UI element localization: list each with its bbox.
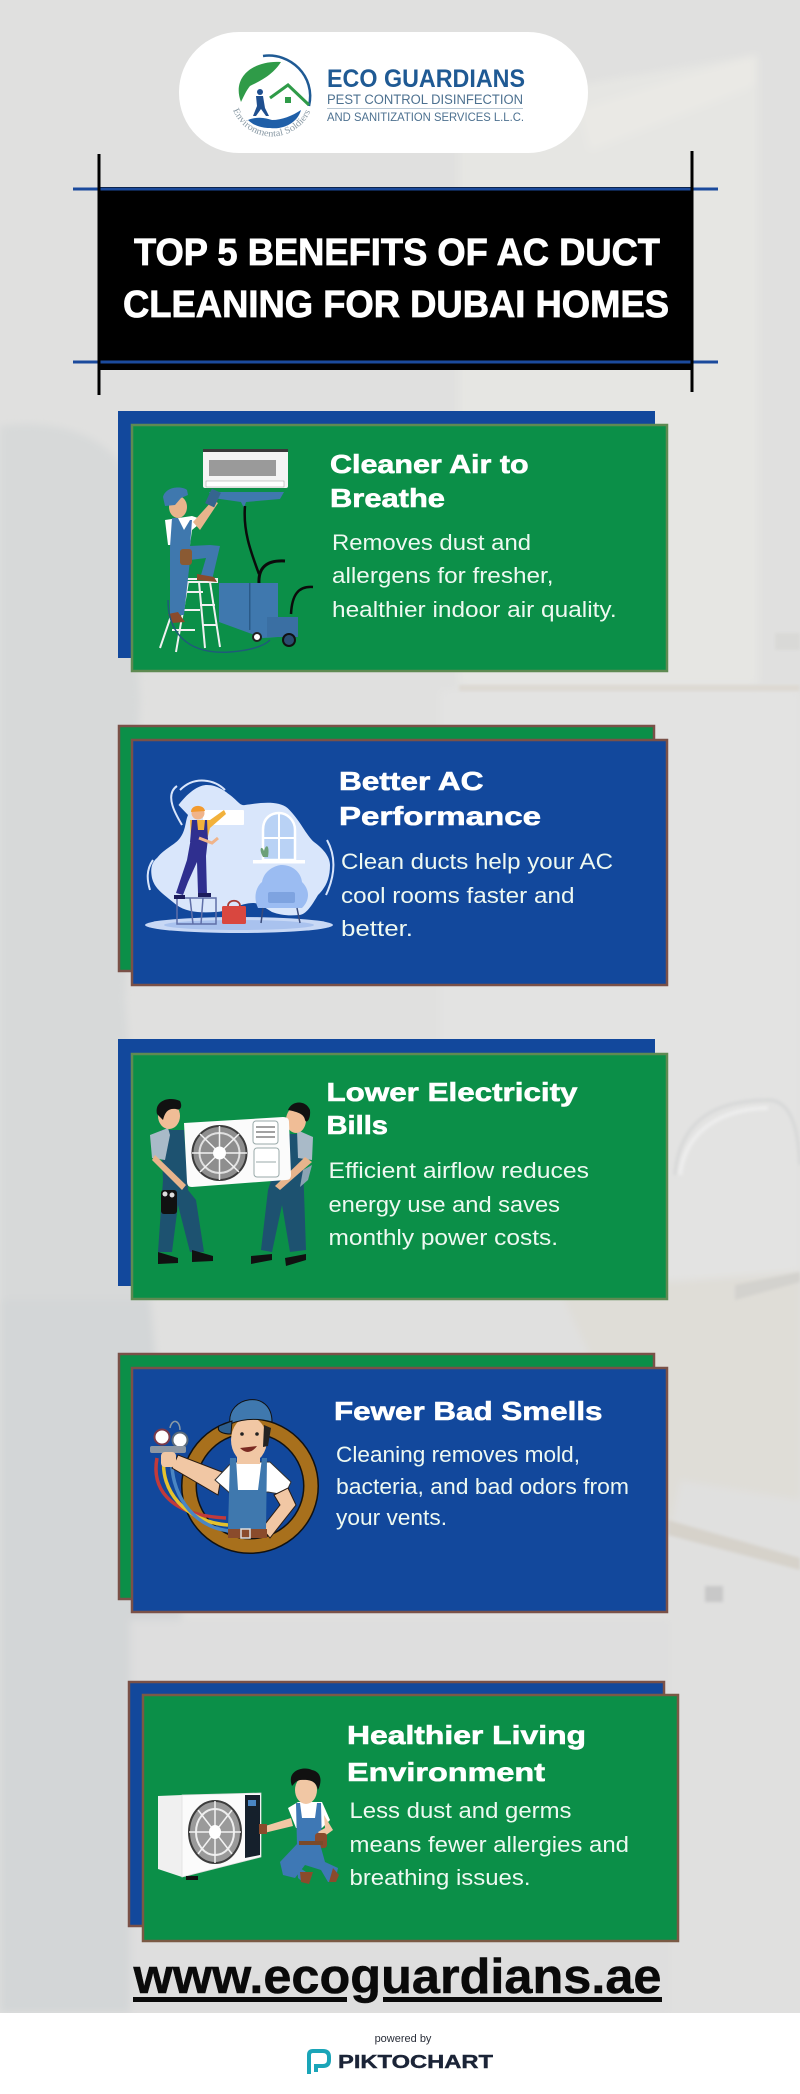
heading line 2: Performance: [339, 801, 541, 831]
description: means fewer allergies and: [350, 1832, 629, 1857]
title banner: CLEANING FOR DUBAI HOMES: [123, 284, 669, 326]
description: Removes dust and: [332, 530, 531, 555]
logo wordmark: ECO GUARDIANS: [327, 65, 525, 93]
heading: Lower Electricity: [326, 1077, 578, 1107]
description: allergens for fresher,: [332, 563, 554, 588]
heading: Healthier Living: [347, 1720, 586, 1750]
icon: technician servicing AC in room: [145, 781, 333, 933]
logo emblem: [233, 54, 312, 136]
heading line 2: Breathe: [330, 483, 445, 513]
description: cool rooms faster and: [341, 883, 574, 908]
panel: fewer bad smells: [119, 1354, 667, 1612]
description: Cleaning removes mold,: [336, 1442, 580, 1467]
description: Less dust and germs: [350, 1798, 572, 1823]
icon: Piktochart mark: [309, 2051, 329, 2074]
icon: technician cleaning wall AC: [160, 449, 313, 652]
title banner: TOP 5 BENEFITS OF AC DUCT: [134, 232, 660, 274]
heading: Fewer Bad Smells: [334, 1396, 602, 1426]
logo pill: [179, 32, 588, 153]
powered by label: powered by: [375, 2033, 432, 2045]
logo wordmark: PEST CONTROL DISINFECTION: [327, 92, 523, 107]
logo emblem: Environmental Soldiers: [233, 108, 310, 136]
heading: Better AC: [339, 766, 484, 796]
website link: www.ecoguardians.ae: [132, 1950, 662, 2004]
footer: [0, 2013, 800, 2094]
heading line 2: Environment: [347, 1757, 545, 1787]
panel: healthier living environment: [129, 1682, 678, 1941]
icon: technician fixing outdoor AC unit: [158, 1769, 339, 1884]
description: bacteria, and bad odors from: [336, 1474, 629, 1499]
description: your vents.: [336, 1505, 447, 1530]
logo wordmark: AND SANITIZATION SERVICES L.L.C.: [327, 110, 524, 124]
description: [332, 530, 617, 622]
icon: two technicians carrying outdoor AC unit: [150, 1099, 313, 1266]
description: [341, 849, 613, 941]
title banner: [73, 151, 718, 395]
description: monthly power costs.: [328, 1225, 558, 1250]
panel: lower electricity bills: [118, 1039, 667, 1299]
heading line 2: Bills: [326, 1110, 388, 1140]
description: Clean ducts help your AC: [341, 849, 613, 874]
panel: better AC performance: [119, 726, 667, 985]
description: breathing issues.: [350, 1865, 530, 1890]
description: [328, 1158, 589, 1250]
Piktochart wordmark: PIKTOCHART: [338, 2052, 493, 2072]
description: Efficient airflow reduces: [328, 1158, 589, 1183]
description: better.: [341, 916, 413, 941]
panel: cleaner air to breathe: [118, 411, 667, 671]
description: healthier indoor air quality.: [332, 597, 617, 622]
heading: Cleaner Air to: [330, 449, 529, 479]
logo wordmark: [327, 65, 525, 124]
icon: technician with gauges and hose ring: [150, 1400, 311, 1546]
description: [350, 1798, 629, 1890]
description: energy use and saves: [328, 1192, 560, 1217]
description: [336, 1442, 629, 1530]
